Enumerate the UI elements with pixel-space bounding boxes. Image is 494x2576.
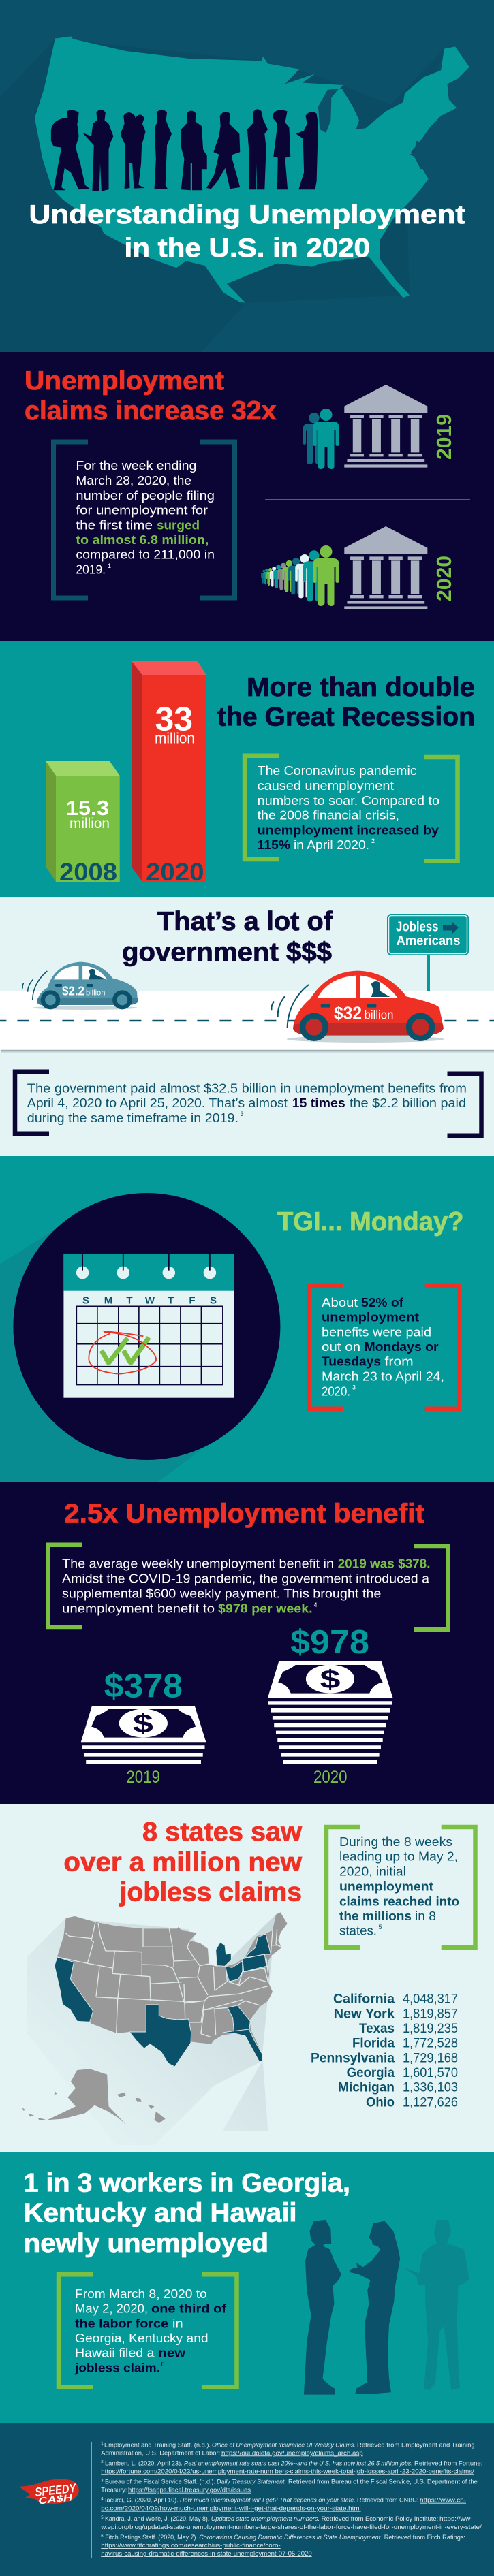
- references: 5: [101, 2516, 104, 2520]
- table: claims by state: 1,772,528: [403, 2037, 458, 2051]
- heading: government $$$: [122, 938, 332, 967]
- icon: calendar: F: [189, 1294, 196, 1306]
- text block: from: [384, 1355, 414, 1369]
- heading: over a million new: [63, 1848, 303, 1877]
- text block: April 4, 2020 to April 25, 2020. That’s almost: [27, 1096, 288, 1110]
- text block: the 2008 financial crisis,: [258, 809, 399, 823]
- references: How much unemployment will I get? That depends on your state.: [180, 2497, 356, 2504]
- bracket: [309, 1286, 459, 1409]
- big car: $32 billion: billion: [364, 1008, 394, 1022]
- panel: 8 states: [0, 1804, 494, 2152]
- heading: More than double: [247, 673, 475, 702]
- icon: bank 2019: [344, 385, 427, 468]
- small car: $2.2 billion: [22, 962, 138, 1010]
- references: 6: [101, 2534, 104, 2539]
- references: navirus-causing-dramatic-differences-in-state-unemployment-07-05-2020: [101, 2550, 312, 2557]
- bracket: [48, 1545, 448, 1629]
- sign: Jobless Americans: Jobless: [396, 920, 439, 935]
- money stack 2019: [81, 1668, 206, 1787]
- heading: [25, 366, 277, 426]
- table: claims by state: California: [333, 1992, 395, 2007]
- text block: 2020.: [322, 1384, 350, 1398]
- references: bc.com/2020/04/09/how-much-unemployment-will-i-get-that-depends-on-your-state.html: [101, 2505, 361, 2512]
- heading: TGI... Monday?: [277, 1207, 463, 1237]
- table: claims by state: 1,127,626: [403, 2095, 458, 2110]
- text block: [74, 2287, 227, 2374]
- references: https://fortune.com/2020/04/23/us-unemployment-rate-num bers-claims-this-week-total-job-losses-april-23-2020-benefits-claims/: [101, 2468, 474, 2475]
- year label 2020: 2020: [432, 556, 456, 601]
- references: Retrieved from Economic Policy Institute:: [322, 2515, 438, 2522]
- references: Real unemployment rate soars past 20%--and the U.S. has now lost 26.5 million jobs.: [184, 2460, 413, 2466]
- references: Iacurci, G. (2020, April 10).: [105, 2497, 179, 2504]
- text block: benefits were paid: [322, 1325, 431, 1339]
- road: [0, 991, 494, 1053]
- text block: 115%: [258, 838, 290, 852]
- text block: surged: [157, 518, 200, 532]
- text block: in: [172, 2317, 183, 2330]
- icon: calendar: [63, 1254, 234, 1398]
- sign: Jobless Americans: [387, 914, 469, 991]
- text block: jobless claim.: [74, 2361, 160, 2374]
- text block: [27, 1081, 467, 1125]
- table: claims by state: 1,601,570: [403, 2066, 458, 2080]
- map shadow: [0, 39, 444, 352]
- text block: 2019 was $378.: [338, 1557, 431, 1571]
- table: claims by state: Pennsylvania: [311, 2051, 395, 2065]
- bar 2008: 2008: [59, 858, 117, 886]
- references: Daily Treasury Statement.: [217, 2479, 286, 2485]
- text block: 6: [161, 2361, 165, 2368]
- bracket: [245, 756, 458, 861]
- state: California: [55, 1957, 93, 2022]
- title: [29, 200, 465, 263]
- bar 2008: million: [70, 816, 110, 831]
- bar 2008: 15.3: [66, 796, 109, 820]
- heading: 2.5x Unemployment benefit: [64, 1499, 424, 1529]
- state: Georgia: [228, 2005, 250, 2031]
- text block: unemployment: [339, 1880, 433, 1894]
- icon: calendar: W: [145, 1294, 155, 1306]
- text block: Amidst the COVID-19 pandemic, the government introduced a: [62, 1572, 430, 1586]
- text block: in April 2020.: [294, 838, 369, 852]
- state: Texas: [129, 2005, 191, 2067]
- bar 2008: [46, 761, 120, 886]
- heading: [24, 2168, 350, 2258]
- big car: $32 billion: $32: [334, 1003, 362, 1023]
- map of the United States: [35, 36, 469, 303]
- references: Bureau of the Fiscal Service Staff. (n.d.).: [105, 2479, 215, 2485]
- money stack 2019: $: [133, 1710, 153, 1738]
- text block: Mondays or: [364, 1340, 439, 1354]
- text block: 4: [313, 1602, 318, 1608]
- text block: During the 8 weeks: [339, 1835, 452, 1849]
- state: New York: [245, 1934, 271, 1958]
- state: Ohio: [226, 1961, 243, 1982]
- bracket: [59, 2274, 237, 2387]
- silhouettes: talking people: [304, 2220, 469, 2395]
- references: Retrieved from Fortune:: [414, 2460, 482, 2466]
- text block: caused unemployment: [258, 779, 394, 793]
- text block: The average weekly unemployment benefit in: [62, 1557, 334, 1571]
- text block: out on: [322, 1340, 360, 1354]
- text block: numbers to soar. Compared to: [258, 794, 439, 808]
- references: https://ww-: [439, 2515, 473, 2522]
- references: [100, 2441, 482, 2557]
- icon: calendar: T: [126, 1294, 133, 1306]
- table: claims by state: Michigan: [338, 2081, 395, 2095]
- table: claims by state: Georgia: [347, 2066, 395, 2080]
- silhouette: man: [304, 2220, 341, 2395]
- icon: bank 2020: [344, 526, 427, 609]
- text block: March 23 to April 24,: [322, 1369, 444, 1383]
- bar 2020: million: [155, 730, 195, 747]
- table: claims by state: [311, 1992, 458, 2110]
- bar 2020: 2020: [146, 858, 204, 886]
- money stack 2019: 2019: [126, 1768, 160, 1787]
- text block: Tuesdays: [322, 1355, 381, 1369]
- bar 2020: [132, 661, 206, 886]
- money stack 2020: 2020: [313, 1768, 348, 1787]
- heading: 8 states saw: [142, 1817, 303, 1847]
- map shadow: [27, 1915, 276, 2145]
- title: in the U.S. in 2020: [124, 234, 370, 263]
- text block: Georgia, Kentucky and: [75, 2332, 209, 2345]
- title: Understanding Unemployment: [29, 200, 465, 229]
- text block: leading up to May 2,: [339, 1850, 458, 1864]
- text block: The government paid almost $32.5 billion in unemployment benefits from: [27, 1081, 467, 1095]
- icon: calendar: T: [168, 1294, 174, 1306]
- table: claims by state: New York: [334, 2007, 395, 2021]
- text block: unemployment: [322, 1311, 419, 1324]
- panel: unemployment benefit: [0, 1482, 494, 1804]
- text block: unemployment benefit to: [62, 1602, 215, 1615]
- table: claims by state: Florida: [352, 2037, 395, 2051]
- navy circle: [13, 1193, 280, 1460]
- icon: calendar: S: [82, 1294, 89, 1306]
- table: claims by state: 1,819,235: [403, 2022, 458, 2036]
- text block: 2019.: [76, 563, 106, 577]
- text block: [322, 1296, 444, 1398]
- text block: From March 8, 2020 to: [75, 2287, 207, 2301]
- table: claims by state: Ohio: [366, 2095, 395, 2110]
- silhouette: woman: [349, 2221, 400, 2394]
- text block: one third of: [151, 2302, 227, 2316]
- references: Retrieved from CNBC:: [357, 2497, 418, 2504]
- text block: 5: [379, 1924, 382, 1930]
- text block: 52% of: [361, 1296, 404, 1309]
- bracket: [326, 1827, 476, 1947]
- references: Retrieved from Employment and Training: [357, 2441, 475, 2448]
- panel: claims increase: [0, 352, 494, 641]
- references: https://oui.doleta.gov/unemploy/claims_arch.asp: [221, 2449, 363, 2456]
- panel: footer: [0, 2423, 494, 2576]
- text block: to almost 6.8 million,: [76, 533, 209, 547]
- table: claims by state: 4,048,317: [403, 1992, 458, 2007]
- heading: [63, 1817, 303, 1907]
- text block: [339, 1835, 459, 1938]
- money stack 2020: $978: [290, 1624, 369, 1661]
- references: w.epi.org/blog/updated-state-unemployment-numbers-large-shares-of-the-labor-force-have-filed-for-unemployment-in-every-state/: [100, 2524, 482, 2530]
- circle shadow: [0, 1230, 204, 1482]
- heading: claims increase 32x: [25, 396, 277, 426]
- references: https://www.cn-: [420, 2497, 466, 2504]
- text block: the millions: [339, 1909, 412, 1923]
- text block: for unemployment for: [76, 503, 208, 517]
- references: Retrieved from Fitch Ratings:: [384, 2534, 465, 2541]
- references: Coronavirus Causing Dramatic Differences in State Unemployment.: [199, 2534, 382, 2541]
- bar 2020: 33: [155, 701, 193, 738]
- money stack 2019: $378: [104, 1668, 183, 1705]
- references: 3: [101, 2479, 104, 2483]
- big car: $32 billion: [271, 971, 444, 1043]
- text block: The Coronavirus pandemic: [258, 764, 417, 778]
- small car: $2.2 billion: $2.2: [62, 985, 84, 998]
- text block: 15 times: [292, 1096, 345, 1110]
- references: https://fsapps.fiscal.treasury.gov/dts/issues: [128, 2487, 251, 2494]
- map of contiguous states: [55, 1912, 288, 2067]
- text block: the labor force: [75, 2317, 168, 2330]
- bracket: [15, 1072, 481, 1136]
- heading: Unemployment: [25, 366, 224, 396]
- heading: That’s a lot of: [157, 907, 333, 936]
- text block: 3: [240, 1111, 244, 1117]
- text block: the $2.2 billion paid: [350, 1096, 466, 1110]
- logo: Speedy Cash: SPEEDY: [34, 2481, 78, 2499]
- table: claims by state: 1,336,103: [403, 2081, 458, 2095]
- text block: states.: [339, 1924, 377, 1938]
- references: Administration, U.S. Department of Labor:: [101, 2449, 220, 2456]
- references: https://www.fitchratings.com/research/us-public-finance/coro-: [101, 2542, 281, 2549]
- logo: Speedy Cash: CA$H: [37, 2492, 74, 2507]
- map: Alaska and Hawaii: [22, 2069, 166, 2125]
- icon: people queue 2020: [261, 545, 339, 606]
- silhouette: third person: [403, 2220, 469, 2390]
- logo: Speedy Cash: [19, 2479, 79, 2507]
- heading: [122, 907, 333, 967]
- panel: 1 in 3 workers: [0, 2152, 494, 2423]
- heading: 1 in 3 workers in Georgia,: [24, 2168, 350, 2197]
- references: Lambert, L. (2020, April 23).: [105, 2460, 183, 2466]
- text block: number of people filing: [76, 489, 215, 503]
- table: claims by state: 1,819,857: [403, 2007, 458, 2021]
- text block: About: [322, 1296, 358, 1309]
- sign: Jobless Americans: Americans: [397, 934, 461, 949]
- small car: $2.2 billion: billion: [86, 989, 105, 998]
- icon: calendar: S: [210, 1294, 217, 1306]
- references: Treasury:: [101, 2487, 127, 2494]
- text block: supplemental $600 weekly payment. This brought the: [62, 1587, 381, 1600]
- icon: calendar: M: [104, 1294, 112, 1306]
- text block: March 28, 2020, the: [76, 474, 191, 488]
- references: Office of Unemployment Insurance UI Weekly Claims.: [212, 2441, 356, 2448]
- year label 2019: 2019: [432, 414, 456, 460]
- panel: government spending: [0, 897, 494, 1156]
- text block: 2020, initial: [339, 1865, 406, 1879]
- text block: during the same timeframe in 2019.: [27, 1111, 238, 1125]
- state: Florida: [223, 2029, 262, 2061]
- text block: For the week ending: [76, 459, 196, 473]
- heading: Kentucky and Hawaii: [24, 2199, 296, 2228]
- text block: 3: [352, 1384, 356, 1390]
- text block: [76, 459, 215, 577]
- heading: [217, 673, 475, 732]
- state: Michigan: [216, 1942, 231, 1966]
- references: Updated state unemployment numbers.: [211, 2515, 320, 2522]
- panel: great recession: [0, 641, 494, 897]
- references: Fitch Ratings Staff. (2020, May 7).: [105, 2534, 198, 2541]
- table: claims by state: 1,729,168: [403, 2051, 458, 2065]
- text block: compared to 211,000 in: [76, 548, 215, 562]
- text block: 1: [108, 562, 111, 569]
- panel: hero: [0, 0, 494, 352]
- money stack 2020: $: [320, 1666, 341, 1694]
- text block: unemployment increased by: [258, 824, 439, 838]
- references: Employment and Training Staff. (n.d.).: [104, 2441, 211, 2448]
- money stack 2020: [268, 1624, 392, 1787]
- references: Kandra, J. and Wolfe, J. (2020, May 8).: [105, 2515, 209, 2522]
- references: 4: [101, 2498, 104, 2502]
- text block: May 2, 2020,: [75, 2302, 148, 2316]
- references: Retrieved from Bureau of the Fiscal Service, U.S. Department of the: [288, 2479, 478, 2485]
- panel: TGI Monday: [0, 1156, 494, 1482]
- text block: [62, 1557, 431, 1615]
- text block: [258, 764, 439, 852]
- text block: Hawaii filed a: [75, 2347, 155, 2360]
- heading: newly unemployed: [24, 2229, 268, 2258]
- heading: jobless claims: [119, 1878, 302, 1907]
- table: claims by state: Texas: [359, 2022, 395, 2036]
- references: 2: [101, 2460, 104, 2464]
- state: Pennsylvania: [243, 1954, 266, 1972]
- text block: new: [158, 2347, 186, 2360]
- icon: people 2019: [303, 409, 339, 469]
- references: 1: [101, 2442, 104, 2446]
- text block: claims reached into: [339, 1894, 459, 1908]
- bracket: [53, 442, 234, 598]
- heading: the Great Recession: [217, 703, 475, 732]
- text block: the first time: [76, 518, 153, 532]
- silhouettes of job seekers: [51, 109, 318, 191]
- text block: in 8: [415, 1909, 436, 1923]
- text block: 2: [371, 838, 375, 844]
- text block: $978 per week.: [218, 1602, 313, 1615]
